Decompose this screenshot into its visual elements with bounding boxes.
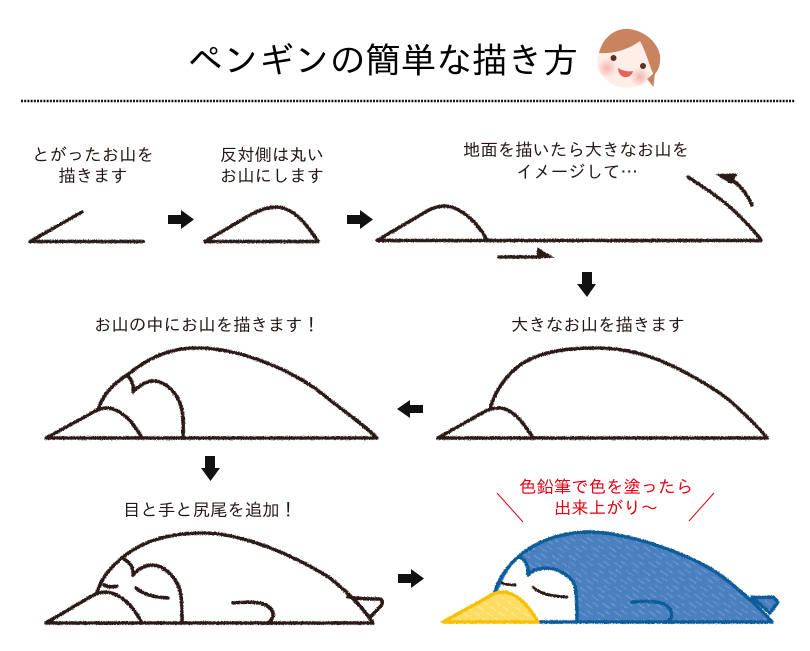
arrow: step 4 to 5 [397, 400, 423, 418]
arrow: step 2 to 3 [347, 210, 373, 229]
text: step 1 [32, 145, 154, 186]
arrow: step 6 to 7 [398, 569, 424, 588]
outline [495, 532, 772, 622]
arrow: ground direction [499, 247, 555, 258]
text: step 3: イメージして… [516, 162, 638, 182]
drawing: coloured penguin [440, 532, 778, 622]
drawing: step 1 pointed line [30, 212, 143, 242]
drawing: step 3 ground and slope [377, 177, 761, 240]
callout line right [689, 493, 714, 521]
text: finished callout: 出来上がり〜 [554, 498, 658, 518]
drawing: step 4 big hill [438, 348, 767, 438]
text: step 2: お山にします [220, 166, 324, 186]
drawing: step 5 hills [46, 348, 377, 438]
beak [443, 592, 538, 622]
callout line left [497, 493, 523, 522]
text: finished callout: 色鉛筆で色を塗ったら [519, 477, 693, 497]
belly [498, 557, 577, 622]
tail [752, 597, 778, 613]
divider [21, 100, 795, 102]
drawing: step 6 penguin outline [46, 533, 382, 623]
body [440, 532, 772, 622]
flipper [632, 601, 672, 622]
eyes [502, 583, 567, 597]
arrow: step 5 down [201, 456, 220, 481]
text: step 6: 目と手と尻尾を追加！ [123, 500, 297, 520]
icon: girl face [590, 28, 660, 96]
drawing: step 2 hill [205, 207, 318, 242]
title: ペンギンの簡単な描き方 [188, 41, 578, 81]
arrow: slope direction [715, 174, 752, 205]
text: step 3 [463, 140, 689, 182]
arrow: step 1 to 2 [168, 210, 194, 229]
text: finished callout [519, 477, 693, 518]
inner line [518, 557, 577, 620]
text: step 5: お山の中にお山を描きます！ [94, 315, 320, 335]
arrow: step 3 down [577, 272, 596, 297]
text: step 2 [220, 145, 324, 186]
text: step 1: とがったお山を [32, 145, 154, 165]
text: step 2: 反対側は丸い [220, 145, 324, 165]
text: step 4: 大きなお山を描きます [511, 315, 685, 335]
text: step 1: 描きます [58, 166, 128, 186]
text: step 3: 地面を描いたら大きなお山を [463, 140, 689, 160]
